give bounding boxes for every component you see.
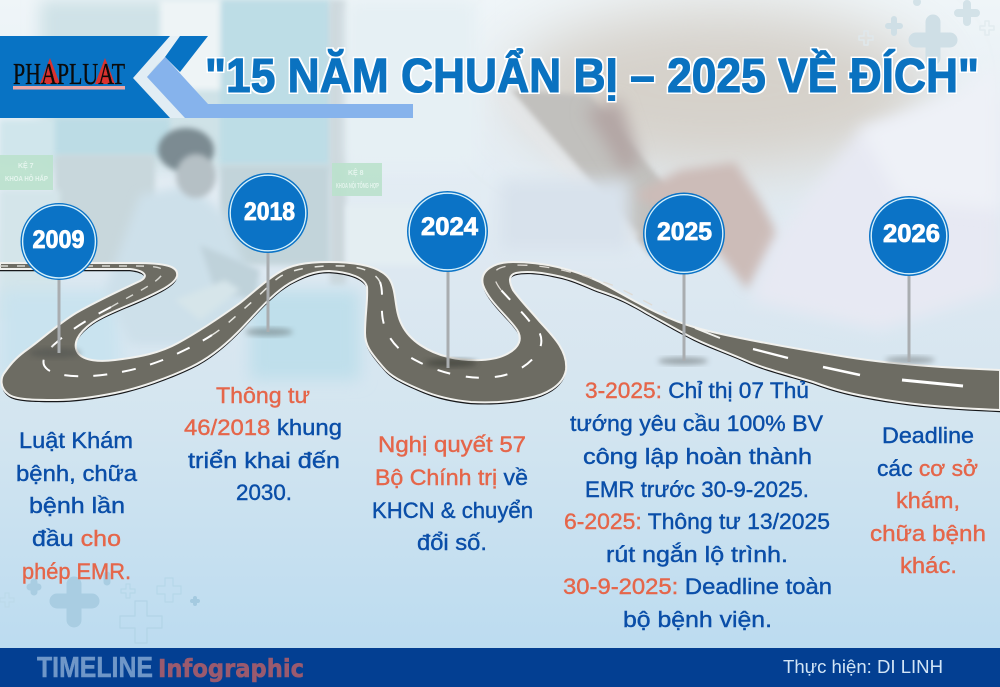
text block: 2025: tướng yêu cầu 100% BV (570, 411, 823, 436)
text block: 2026: các cơ sở (877, 456, 978, 481)
shelf labels in the photo: KHOA NỘI TỔNG HỢP (336, 181, 379, 190)
text block: 2025: rút ngắn lộ trình. (606, 542, 788, 567)
shelf labels in the photo (0, 155, 382, 196)
text block: 2018: triển khai đến (188, 448, 340, 473)
decorative crosses bottom left (0, 575, 198, 643)
text block: 2026: khác. (900, 553, 957, 578)
sign 2024: 2024 (421, 213, 478, 241)
text block: 2025: EMR trước 30-9-2025. (585, 477, 809, 502)
text block: 2018: 46/2018 khung (184, 415, 342, 440)
text block: 2026: Deadline (882, 423, 974, 448)
text block: 2018: 2030. (236, 480, 292, 505)
text block: 2009: Luật Khám (19, 428, 133, 453)
footer bar: Thực hiện: DI LINH (783, 657, 943, 677)
text block: 2025: 30-9-2025: Deadline toàn (563, 574, 832, 599)
text block: 2026 (870, 423, 986, 578)
text block: 2009: phép EMR. (22, 559, 131, 584)
text block: 2009: bệnh lần (29, 493, 125, 518)
text block: 2025: bộ bệnh viện. (623, 607, 772, 632)
footer bar: TIMELINE (37, 652, 153, 684)
sign 2018: 2018 (244, 198, 295, 226)
text block: 2026: khám, (896, 488, 960, 513)
text block: 2024: KHCN & chuyển (372, 498, 533, 523)
winding road (0, 262, 1000, 412)
text block: 2018 (184, 383, 342, 505)
footer bar: Infographic (158, 654, 304, 683)
text block: 2024: đổi số. (417, 530, 487, 555)
sign 2025: 2025 (657, 218, 712, 246)
sign 2009 (20, 203, 98, 358)
text block: 2025: 3-2025: Chỉ thị 07 Thủ (585, 378, 809, 403)
text block: 2009: đầu cho (32, 526, 121, 551)
text block: 2024: Bộ Chính trị về (375, 465, 528, 490)
text block: 2018: Thông tư (216, 383, 310, 408)
sign 2025 (643, 192, 725, 364)
sign 2018 (228, 173, 308, 336)
sign 2009: 2009 (32, 226, 84, 254)
text block: 2025: 6-2025: Thông tư 13/2025 (564, 509, 830, 534)
text block: 2025 (563, 378, 832, 632)
sign 2026: 2026 (883, 220, 940, 248)
shelf labels in the photo: KỆ 8 (348, 168, 364, 177)
text block: 2025: công lập hoàn thành (583, 444, 812, 469)
text block: 2024 (372, 432, 533, 555)
header banner (0, 36, 413, 118)
logo: Pháp Luật: PHAPLUAT (13, 56, 125, 91)
shelf labels in the photo: KHOA HÔ HẤP (5, 173, 48, 183)
text block: 2009: bệnh, chữa (16, 461, 138, 486)
text block: 2009 (16, 428, 138, 584)
footer bar (0, 648, 1000, 687)
text block: 2024: Nghị quyết 57 (378, 432, 526, 457)
sign 2024 (407, 191, 488, 368)
text block: 2026: chữa bệnh (870, 521, 986, 546)
sign 2026 (869, 196, 949, 364)
decorative crosses top right (859, 2, 994, 58)
shelf labels in the photo: KỆ 7 (18, 161, 34, 170)
